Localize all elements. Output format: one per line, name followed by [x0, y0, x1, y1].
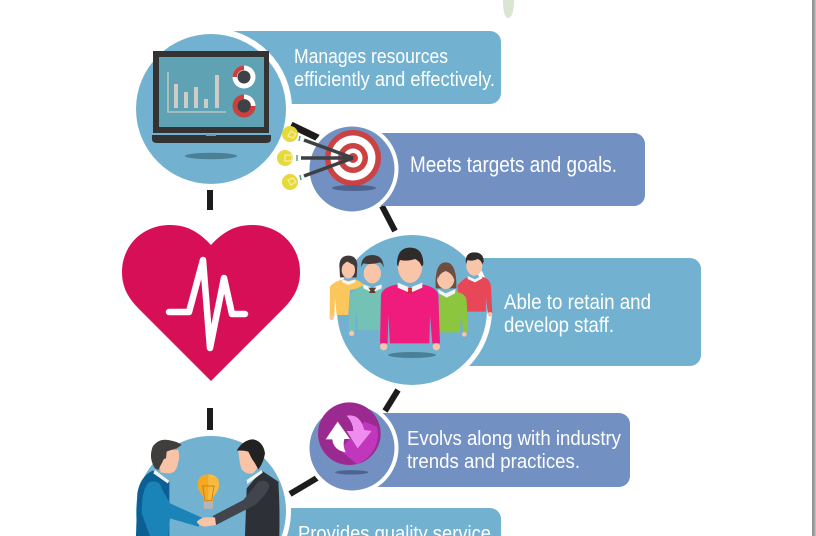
icon: heart with pulse	[122, 225, 300, 381]
text: evolves: Evolvs along with industry	[407, 427, 622, 450]
person: teal	[349, 255, 384, 336]
icon: target with darts	[277, 126, 381, 191]
text: retain staff	[504, 291, 651, 337]
text: manages resources: Manages resources	[294, 46, 448, 68]
text: manages resources	[294, 46, 495, 91]
text: meets targets: Meets targets and goals.	[410, 152, 617, 177]
text: evolves	[407, 427, 622, 473]
circle: staff group icon	[329, 235, 492, 385]
banner: meets targets	[306, 122, 645, 216]
icon: light bulb	[198, 474, 219, 509]
person: right businessman	[197, 439, 280, 536]
person: green	[436, 262, 468, 337]
decorative leaf tip at top	[503, 0, 514, 18]
banner: retain staff	[332, 230, 701, 390]
person: left businessman	[136, 440, 203, 536]
banner: evolves	[306, 402, 630, 494]
circle: laptop icon	[136, 34, 286, 184]
text: retain staff: develop staff.	[504, 314, 614, 337]
person: yellow	[329, 256, 366, 320]
person: pink centre	[380, 248, 440, 358]
text: evolves: trends and practices.	[407, 450, 580, 473]
banner: quality service	[131, 431, 501, 536]
text: retain staff: Able to retain and	[504, 291, 651, 314]
icon: purple cycle arrows	[318, 402, 381, 474]
dashed connecting ring	[210, 125, 398, 494]
text: manages resources: efficiently and effectively.	[294, 69, 495, 91]
banner: manages resources	[130, 28, 501, 190]
person: red	[458, 252, 492, 317]
circle: handshake icon	[136, 436, 286, 536]
